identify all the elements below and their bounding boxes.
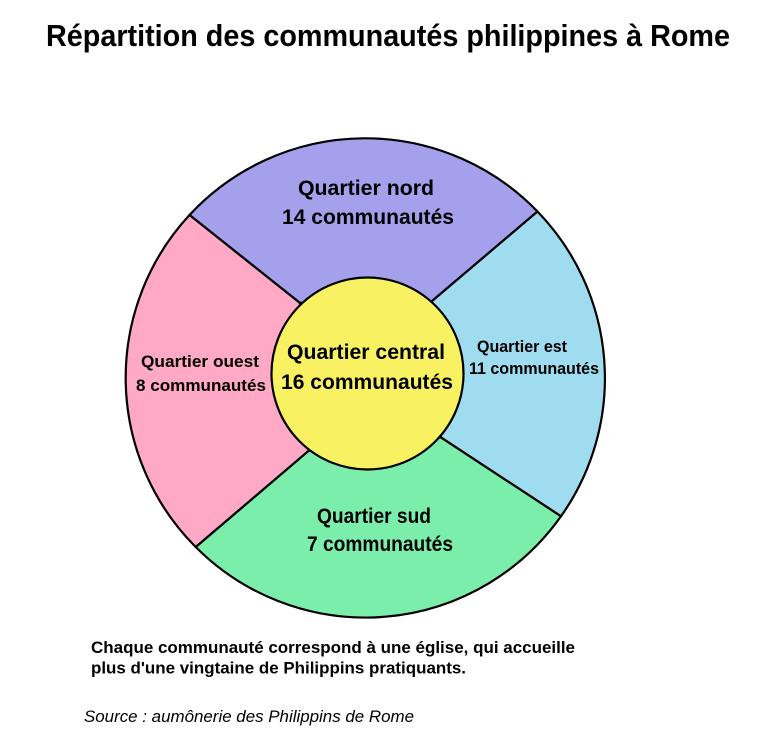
label: quartier nord: [282, 176, 454, 229]
note: Chaque communauté correspond à une église, qui accueille: [91, 639, 575, 657]
segment: quartier nord: [190, 138, 538, 303]
segment: quartier sud: [196, 437, 561, 618]
label: quartier nord: 14 communautés: [282, 205, 454, 229]
label: quartier central: [281, 340, 453, 394]
note: plus d'une vingtaine de Philippins pratiquants.: [91, 660, 466, 678]
note: [91, 639, 575, 678]
label: quartier ouest: [136, 352, 266, 395]
label: quartier central: 16 communautés: [281, 370, 453, 394]
segment: quartier ouest: [126, 215, 309, 547]
title: Répartition des communautés philippines à Rome: [46, 18, 730, 53]
segment: quartier central: [272, 278, 464, 470]
source: Source : aumônerie des Philippins de Rome: [84, 708, 414, 726]
label: quartier sud: Quartier sud: [317, 505, 431, 528]
label: quartier sud: [307, 505, 453, 556]
label: quartier ouest: Quartier ouest: [141, 352, 259, 371]
label: quartier est: 11 communautés: [469, 359, 599, 378]
label: quartier sud: 7 communautés: [307, 533, 453, 556]
segment: quartier est: [432, 212, 605, 516]
label: quartier est: Quartier est: [477, 337, 567, 356]
label: quartier ouest: 8 communautés: [136, 376, 266, 395]
donut chart: [126, 138, 605, 618]
label: quartier nord: Quartier nord: [298, 176, 434, 200]
label: quartier central: Quartier central: [287, 340, 445, 364]
label: quartier est: [469, 337, 599, 378]
